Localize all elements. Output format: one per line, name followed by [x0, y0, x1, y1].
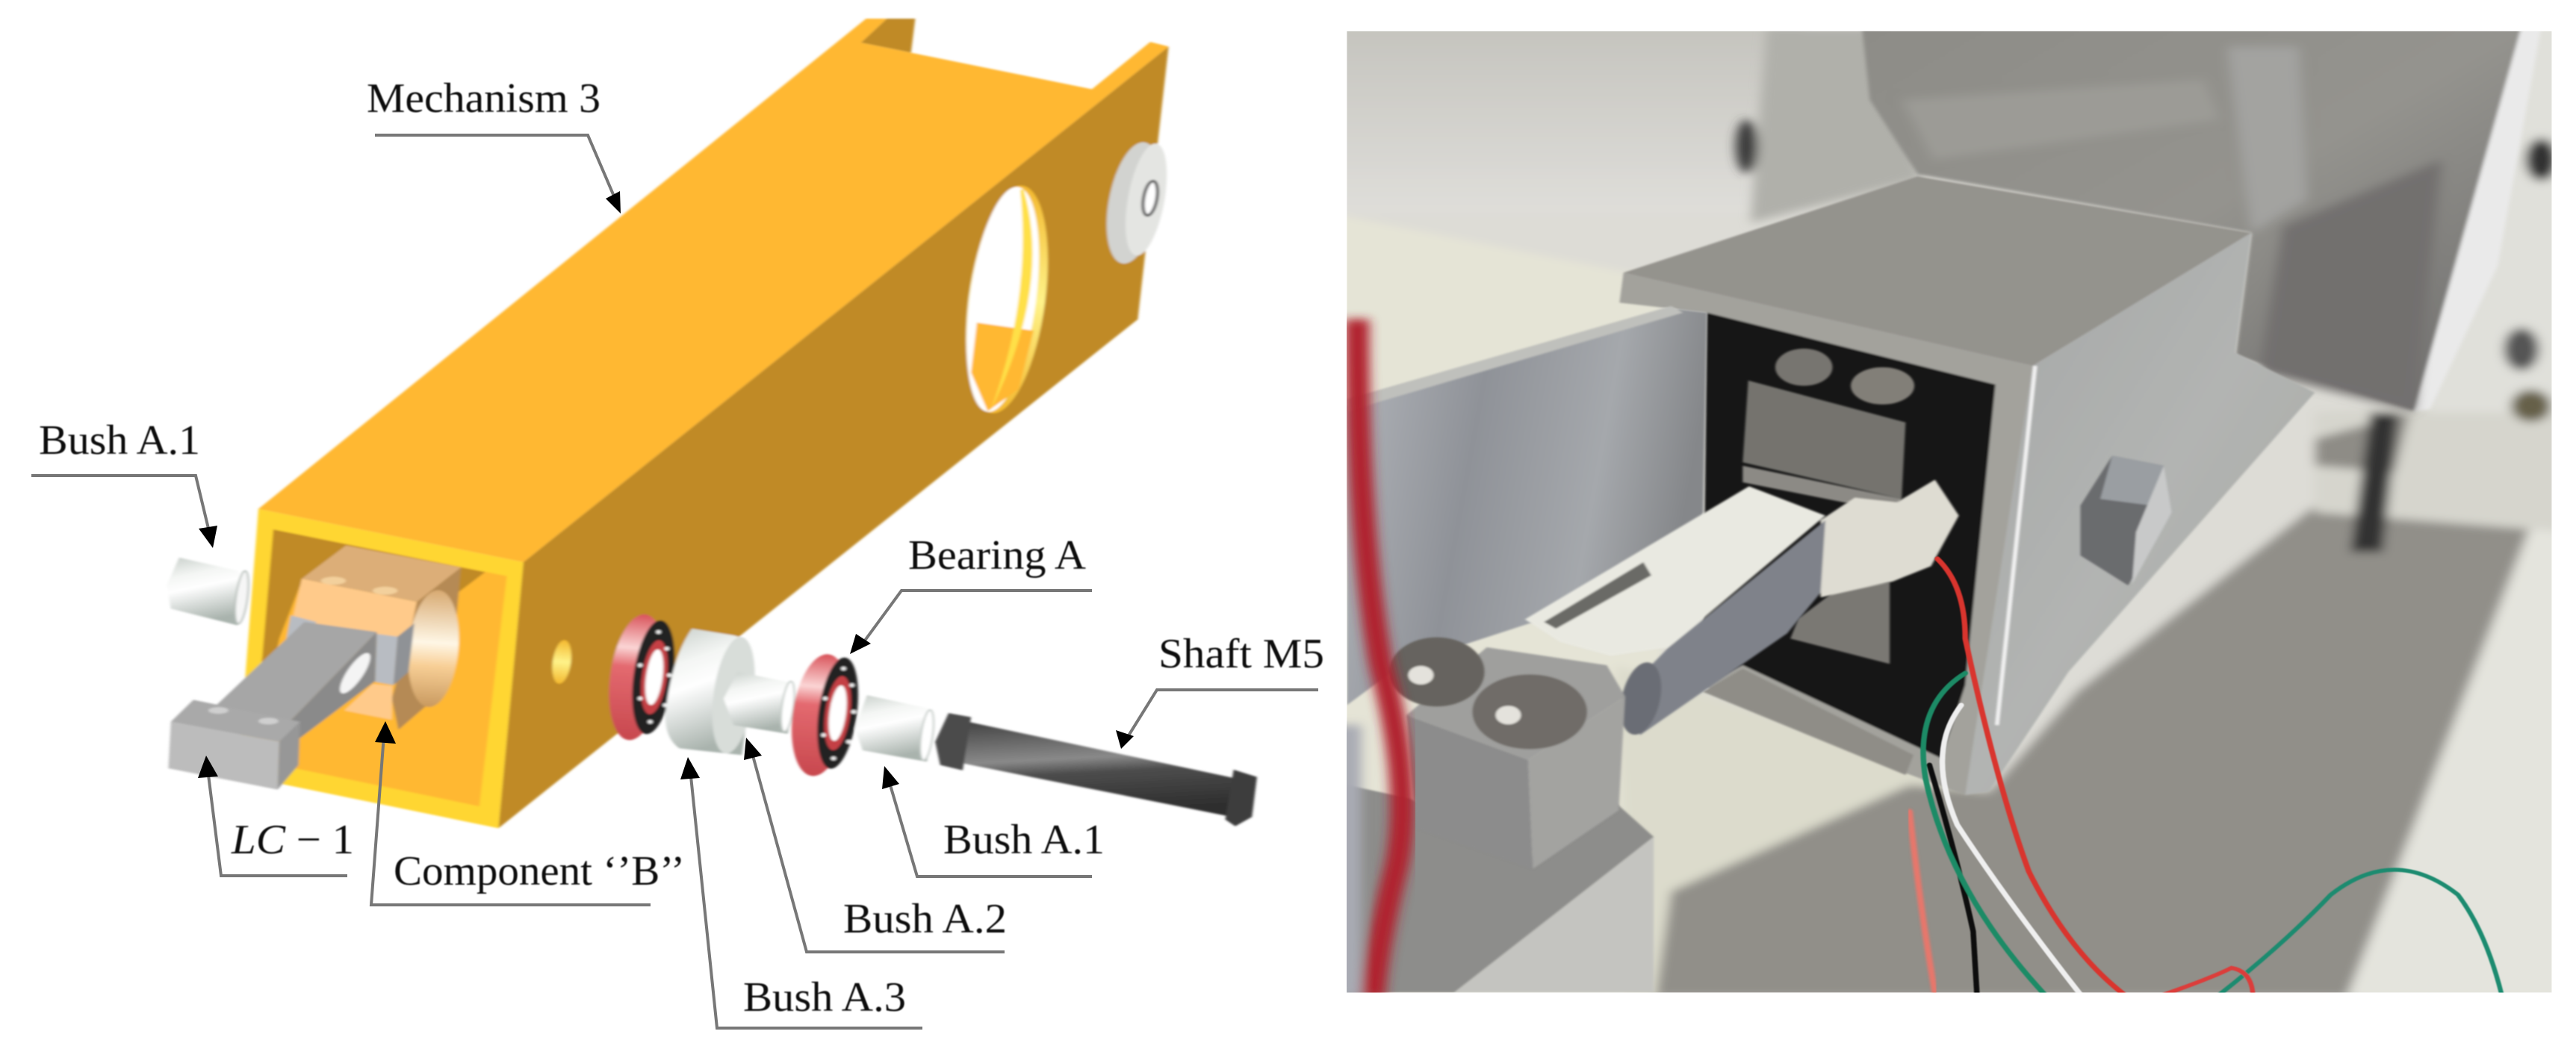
inner clamp block and screws	[1742, 349, 1914, 664]
component B block	[292, 546, 464, 729]
panel: exploded CAD view of mechanism 3	[31, 19, 1324, 1028]
callout: Bush A.2: Bush A.2	[843, 896, 1007, 942]
bearing A right	[785, 652, 864, 778]
callout: Bush A.1 left: Bush A.1	[39, 417, 200, 464]
blurred foreground objects at left edge	[1338, 320, 1403, 997]
square tube top and side	[1619, 176, 2315, 795]
callout: Bush A.1 right	[882, 766, 1105, 877]
large side hole	[954, 182, 1060, 417]
bush A.1 left	[167, 558, 251, 626]
callout: Bush A.1 right: Bush A.1	[943, 817, 1105, 863]
callout: LC-1	[198, 756, 354, 876]
pan head screws	[1389, 638, 1587, 749]
callout: LC-1: LC − 1	[231, 817, 354, 863]
hex nut	[2080, 455, 2172, 585]
photo background	[1329, 20, 2569, 1004]
callout: Bush A.1 left	[31, 417, 217, 548]
callout: Bush A.2	[744, 738, 1007, 952]
callout: Mechanism 3	[367, 75, 621, 214]
load cell wrapped in white sealant	[1406, 479, 1959, 869]
small side hole	[550, 639, 574, 685]
bush A.2	[724, 672, 797, 734]
callout: Bearing A: Bearing A	[908, 532, 1087, 579]
support base	[1347, 785, 1654, 992]
load cell LC-1	[168, 615, 415, 790]
side flap plate	[1347, 309, 1707, 705]
shaft M5	[935, 713, 1257, 826]
callout: Component B	[371, 721, 685, 905]
mechanism 3 yellow box housing	[238, 19, 1169, 828]
callout: Bush A.3: Bush A.3	[743, 974, 906, 1021]
aluminium mechanism behind the tube	[1736, 27, 1922, 222]
bearing A left	[602, 612, 681, 742]
wires	[1910, 558, 2501, 997]
callout: Mechanism 3: Mechanism 3	[367, 75, 600, 122]
bush A.1 right	[855, 695, 936, 762]
callout: Bush A.3	[680, 757, 922, 1028]
washer on far side	[1098, 140, 1174, 267]
panel: photograph of the assembled load cell	[1329, 20, 2569, 1004]
callout: Bearing A	[850, 532, 1092, 654]
callout: Shaft M5	[1116, 631, 1324, 749]
callout: Component B: Component ‘’B’’	[394, 848, 685, 894]
callout: Shaft M5: Shaft M5	[1158, 631, 1324, 677]
bush A.3	[665, 629, 761, 755]
